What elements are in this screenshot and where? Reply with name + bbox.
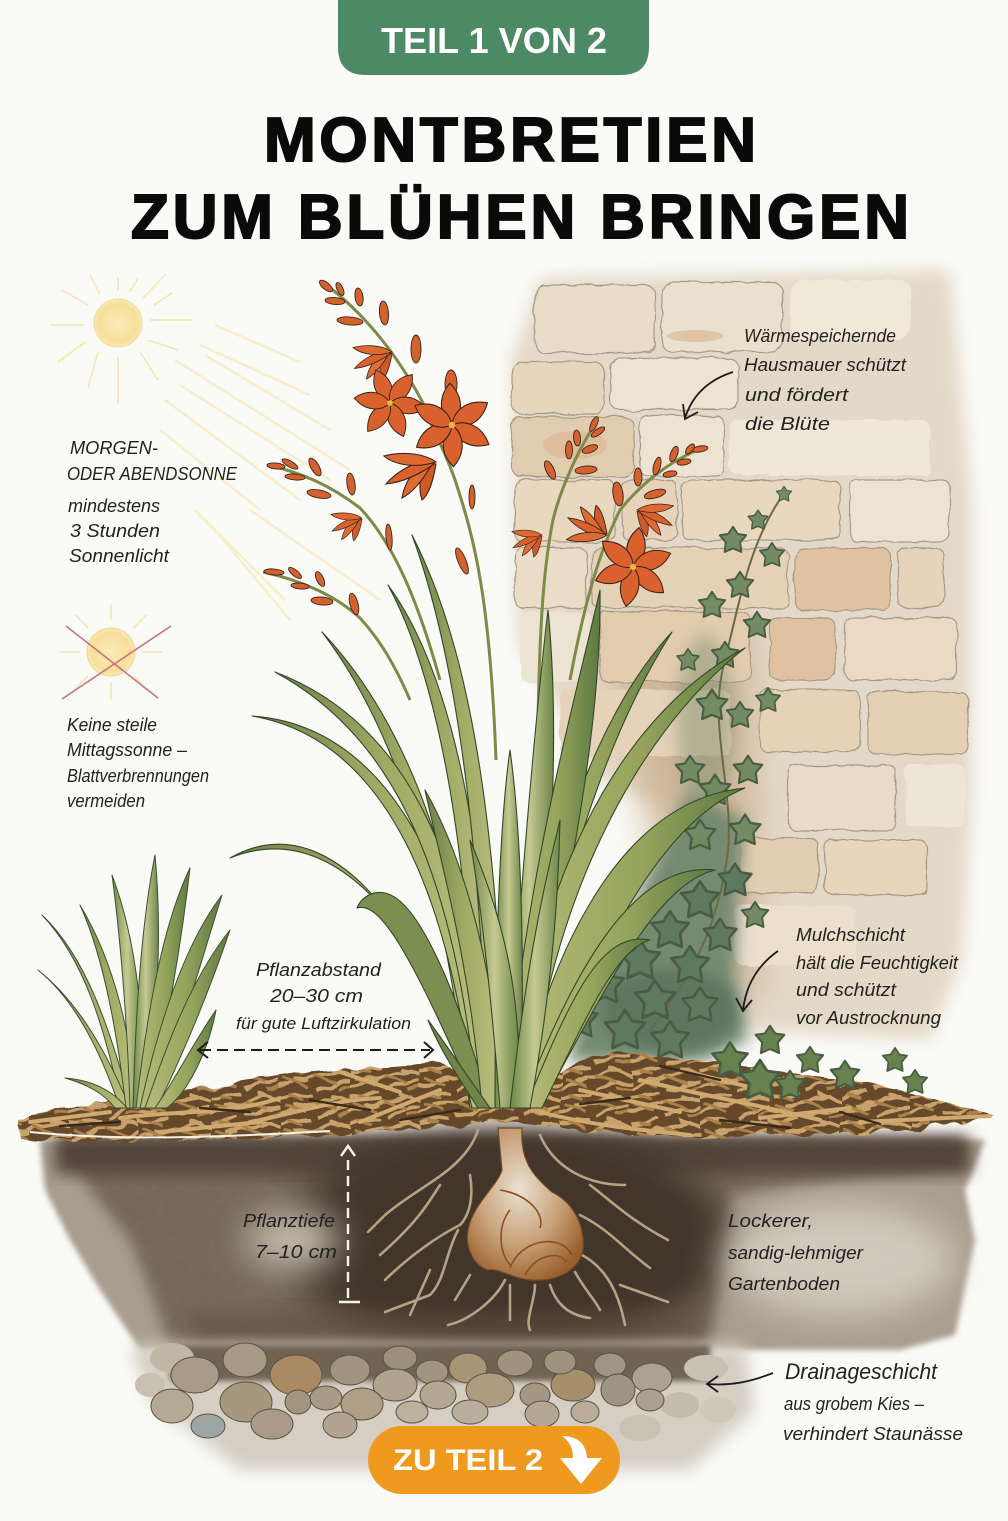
text: Gartenboden (728, 1210, 864, 1294)
text: Gartenboden: sandig-lehmiger (728, 1242, 864, 1263)
text: Gartenboden: Lockerer, (728, 1210, 813, 1231)
arrow: to gravel (707, 1373, 773, 1392)
text: Wärmespeichernde Hausmauer: die Blüte (745, 413, 830, 434)
text: Morgen- oder Abendsonne: ODER ABENDSONNE (67, 463, 238, 484)
badge: Teil 1 von 2 (338, 0, 649, 75)
arrow: to wall (683, 372, 733, 419)
text: Mulchschicht: hält die Feuchtigkeit (796, 952, 959, 973)
icon: crossed out midday sun (60, 604, 171, 700)
text: Mulchschicht (796, 924, 959, 1028)
text: Morgen- oder Abendsonne: 3 Stunden (70, 520, 160, 541)
blossoms (637, 504, 673, 537)
arrow: planting distance (198, 1042, 433, 1058)
text: Mulchschicht: Mulchschicht (796, 924, 906, 945)
text: Pflanzabstand: Pflanzabstand (256, 959, 382, 980)
text: Wärmespeichernde Hausmauer: Wärmespeichernde (744, 325, 896, 346)
arrow: planting depth (339, 1146, 360, 1302)
main plant: leaves (230, 535, 745, 1108)
text: Drainageschicht (783, 1359, 963, 1444)
title: ZUM BLÜHEN BRINGEN (131, 183, 909, 252)
text: Morgen- oder Abendsonne (67, 437, 238, 566)
roots (368, 1130, 668, 1330)
icon: curved arrow (560, 1436, 602, 1484)
buds (264, 278, 708, 616)
text: Pflanztiefe: 7–10 cm (255, 1241, 337, 1262)
panel: brick wall (512, 270, 972, 1040)
text: Drainageschicht: Drainageschicht (785, 1359, 938, 1384)
text: Pflanztiefe: Pflanztiefe (243, 1210, 335, 1231)
text: Mulchschicht: vor Austrocknung (796, 1007, 942, 1028)
drainage gravel layer (130, 1343, 755, 1470)
icon: sun (50, 274, 193, 404)
sun rays (160, 325, 380, 620)
text: Keine steile Mittagssonne: vermeiden (67, 790, 145, 811)
text: Drainageschicht: aus grobem Kies – (784, 1393, 925, 1414)
text: Pflanztiefe (243, 1210, 337, 1262)
text: Mulchschicht: und schützt (796, 979, 897, 1000)
mulch layer (18, 1052, 994, 1142)
stems (263, 284, 703, 760)
text: Keine steile Mittagssonne: Blattverbrennungen (67, 765, 209, 786)
soil (40, 1128, 985, 1352)
text: Gartenboden: Gartenboden (728, 1273, 840, 1294)
text: Wärmespeichernde Hausmauer: und fördert (745, 384, 849, 405)
text: Keine steile Mittagssonne (67, 714, 209, 811)
text: Drainageschicht: verhindert Staunässe (783, 1423, 963, 1444)
text: Pflanzabstand: für gute Luftzirkulation (236, 1014, 411, 1033)
small plant left (38, 855, 230, 1108)
button: Zu Teil 2: ZU TEIL 2 (393, 1444, 543, 1477)
title (131, 106, 909, 252)
text: Morgen- oder Abendsonne: Sonnenlicht (69, 545, 170, 566)
ivy climbing the wall (562, 486, 792, 1062)
stems and flowers (263, 278, 708, 760)
text: Pflanzabstand (236, 959, 411, 1033)
text: Morgen- oder Abendsonne: MORGEN- (70, 437, 158, 458)
badge: Teil 1 von 2: TEIL 1 VON 2 (381, 20, 607, 61)
right groundcover plants (712, 1026, 927, 1098)
text: Morgen- oder Abendsonne: mindestens (68, 495, 160, 516)
text: Keine steile Mittagssonne: Mittagssonne – (67, 739, 188, 760)
text: Pflanzabstand: 20–30 cm (269, 985, 363, 1006)
title: MONTBRETIEN (264, 106, 756, 175)
bulb and roots (368, 1128, 668, 1330)
text: Keine steile Mittagssonne: Keine steile (67, 714, 157, 735)
button: Zu Teil 2 (368, 1426, 620, 1494)
text: Wärmespeichernde Hausmauer: Hausmauer schützt (744, 354, 907, 375)
text: Wärmespeichernde Hausmauer (744, 325, 907, 434)
arrow: to mulch (736, 951, 778, 1011)
